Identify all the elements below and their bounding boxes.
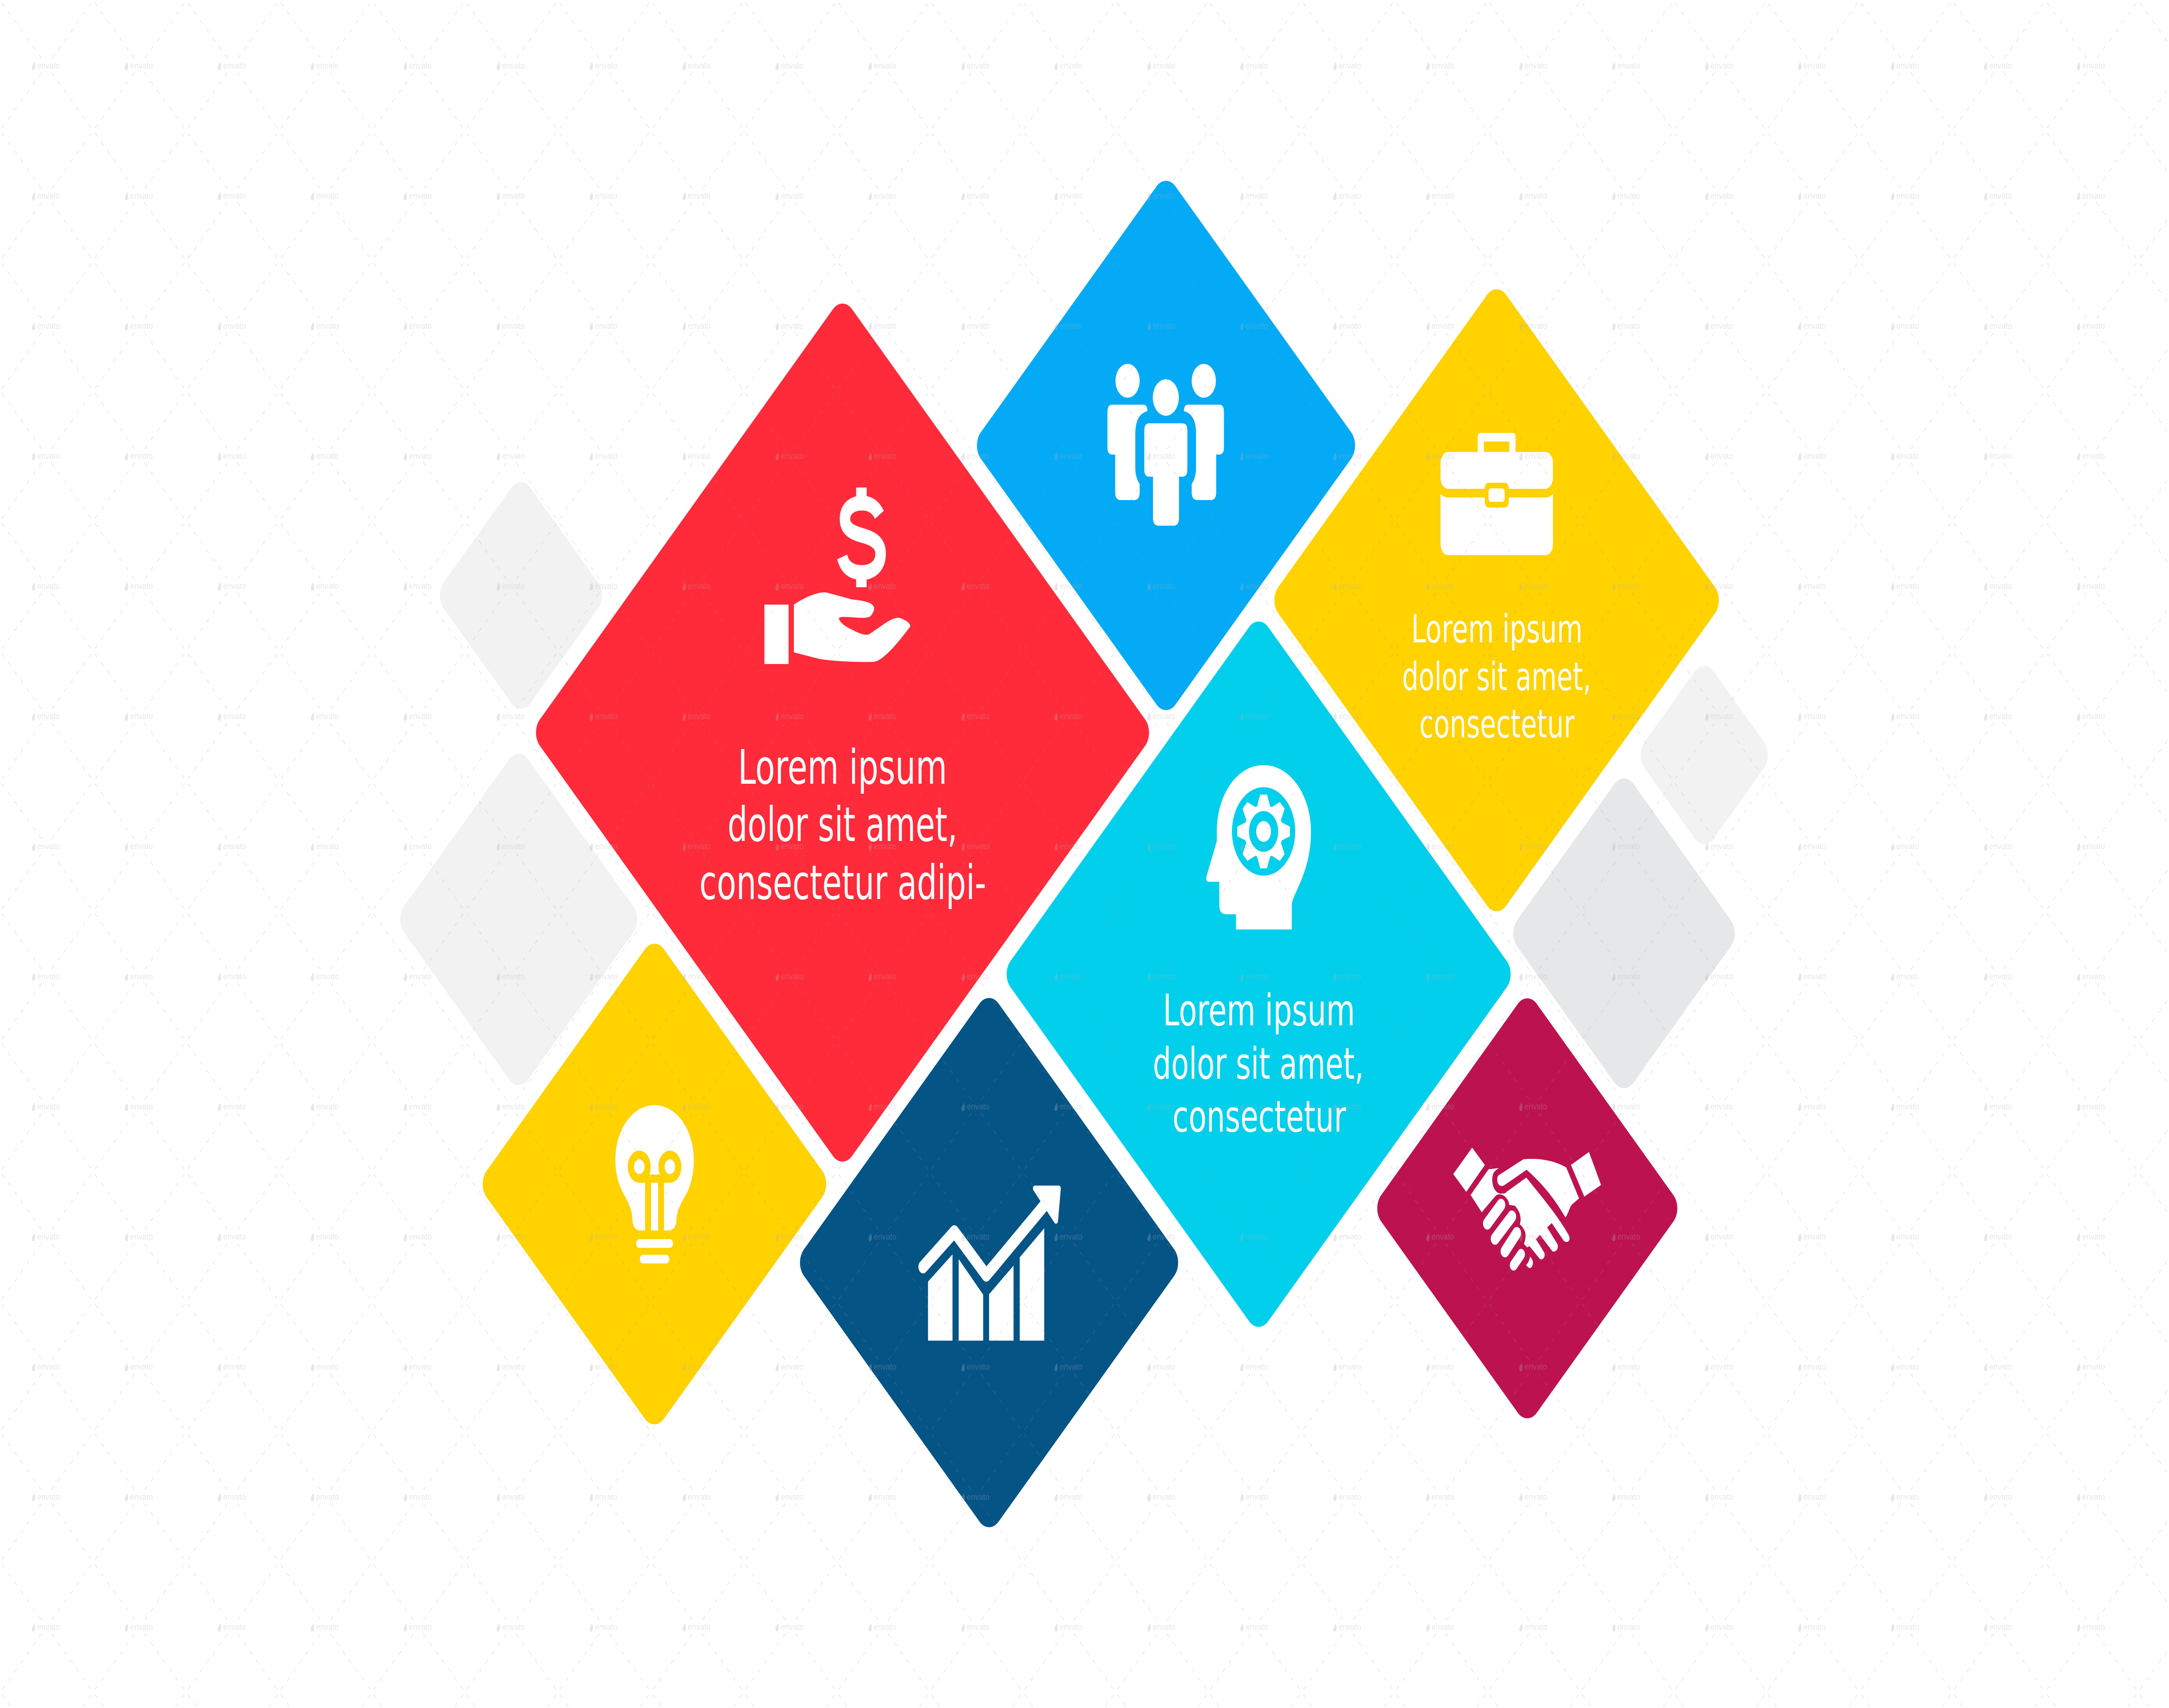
text: cyan diamond label: dolor sit amet, xyxy=(1153,1039,1364,1089)
panel: red diamond xyxy=(531,296,1154,1169)
icon: briefcase xyxy=(1441,433,1553,555)
panel: crimson diamond xyxy=(1372,991,1683,1426)
text: red diamond label xyxy=(699,739,986,910)
panel: blue diamond xyxy=(971,173,1360,718)
icon: growth chart xyxy=(923,1188,1059,1341)
panel: yellow diamond lower left xyxy=(477,936,832,1432)
text: cyan diamond label: consectetur xyxy=(1173,1092,1346,1142)
icon: people group xyxy=(1107,364,1224,526)
text: yellow diamond label: Lorem ipsum xyxy=(1411,607,1583,652)
text: yellow diamond label: dolor sit amet, xyxy=(1402,654,1591,700)
icon: handshake xyxy=(1453,1148,1601,1268)
text: red diamond label: consectetur adipi- xyxy=(699,855,986,910)
panel: grey diamond small right xyxy=(1635,658,1773,852)
icon: head with gear xyxy=(1206,765,1311,929)
panel: cyan diamond xyxy=(1001,614,1516,1335)
text: red diamond label: dolor sit amet, xyxy=(727,797,957,852)
panel: grey diamond upper left xyxy=(434,474,607,717)
text: yellow diamond label: consectetur xyxy=(1419,702,1575,747)
text: yellow diamond label xyxy=(1402,607,1591,747)
text: red diamond label: Lorem ipsum xyxy=(738,739,947,795)
panel: yellow diamond upper right xyxy=(1269,281,1724,919)
panel: grey diamond left xyxy=(395,746,642,1093)
text: cyan diamond label: Lorem ipsum xyxy=(1163,985,1355,1036)
text: cyan diamond label xyxy=(1153,985,1364,1142)
panel: navy diamond xyxy=(794,990,1184,1535)
panel: grey diamond right xyxy=(1508,771,1740,1096)
icon: light bulb xyxy=(616,1105,694,1263)
icon: hand with dollar xyxy=(764,488,910,664)
